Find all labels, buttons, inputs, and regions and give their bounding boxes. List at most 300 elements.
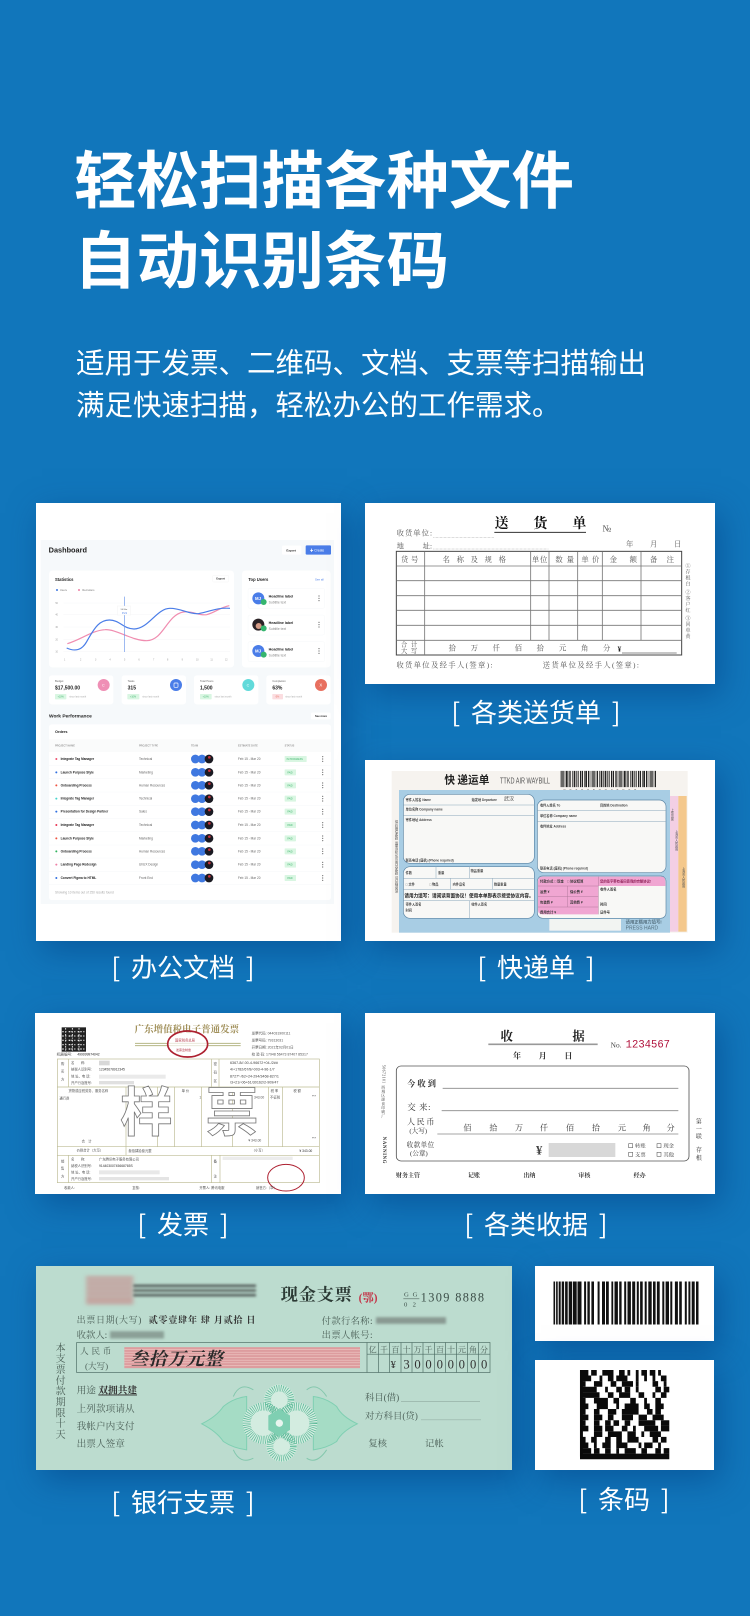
amount table: 十 — [403, 1344, 411, 1354]
statistics chart card: 11 — [210, 660, 213, 662]
stat card: budget: $17,500.00 — [55, 686, 80, 692]
cheque accounting lines: 复核 — [368, 1438, 388, 1450]
amount table — [77, 1342, 490, 1372]
invoice meta: 开票日期: 2021年02月01日 — [252, 1044, 294, 1049]
amount table: 十 — [447, 1344, 455, 1354]
delivery note heading: 送 — [495, 515, 510, 532]
receipt fields: (大写) — [409, 1126, 427, 1135]
sample watermark: 样 — [120, 1071, 173, 1147]
panel: 2D data matrix code — [535, 1360, 714, 1470]
delivery table: 货号 — [401, 555, 421, 564]
row 8 — [55, 847, 323, 856]
row 5 — [55, 807, 323, 816]
orders table: STATUS — [285, 745, 295, 748]
cheque accounting lines — [365, 1392, 444, 1450]
receipt side text: 第一联 — [694, 1118, 701, 1140]
data matrix modules — [580, 1370, 669, 1456]
side vertical text: 上海市人民政府 — [675, 829, 679, 852]
amount table: 人民币 — [80, 1345, 114, 1356]
invoice cipher text: 6367-8//-00-4-96672+04-/2## — [230, 1061, 279, 1065]
receipt payment types — [629, 1142, 675, 1158]
invoice seller info: 方 — [61, 1173, 65, 1178]
caption: office document: [ 办公文档 ] — [111, 948, 255, 985]
stat card: budget: Budget — [55, 679, 64, 683]
invoice goods rows: 单 价 — [182, 1088, 190, 1093]
statistics chart card: Statistics — [55, 577, 74, 582]
goods box — [403, 867, 534, 918]
statistics chart card: 7 — [153, 660, 155, 662]
invoice bottom stamp — [268, 1164, 304, 1191]
delivery table: 拾 — [537, 644, 545, 653]
waybill barcode — [561, 779, 657, 793]
invoice table — [57, 1059, 319, 1183]
receipt left vertical text: NANNING — [381, 1137, 386, 1164]
delivery note fields: 日 — [674, 540, 681, 549]
statistics chart card: 3 — [95, 660, 97, 662]
invoice meta: 发票号码: 79313031 — [252, 1037, 283, 1042]
delivery note heading: 单 — [572, 515, 586, 532]
caption: express waybill: [ 快递单 ] — [477, 948, 595, 985]
goods box: 内件品名 — [453, 881, 465, 886]
delivery note heading — [495, 515, 586, 532]
orders table — [49, 724, 331, 900]
top users card: Subtitle text — [269, 654, 286, 658]
receipt fields: 交 来: — [407, 1102, 431, 1112]
receipt amount units: 拾 — [489, 1122, 497, 1132]
invoice goods rows — [59, 1088, 317, 1153]
invoice seller info: 纳税人识别号: — [71, 1163, 92, 1168]
delivery table: 万 — [471, 644, 478, 653]
row 4: Technical — [139, 797, 152, 801]
row 4: PAID — [287, 798, 293, 801]
row 10: Front End — [139, 876, 153, 880]
row 10 — [55, 874, 323, 882]
invoice goods rows: *** — [312, 1136, 317, 1140]
sender box: 寄件人姓名 Name — [406, 797, 431, 802]
statistics chart card: 6 — [138, 660, 140, 662]
press hard note: PRESS HARD — [626, 926, 659, 932]
invoice goods rows: 货物或应税劳务、服务名称 — [68, 1088, 109, 1093]
row 2: Feb 15 - Mar 20 — [238, 770, 261, 774]
delivery table: 金额 — [610, 555, 650, 564]
blurred bank stamp — [86, 1278, 256, 1302]
dashboard buttons: ✚ Create — [310, 547, 324, 552]
row 7: Marketing — [139, 836, 153, 840]
invoice top stamp — [168, 1031, 208, 1057]
delivery note fields: 年 — [626, 540, 634, 549]
orders table: Orders — [55, 730, 68, 734]
receipt left vertical text: 50672101 西城区副食印刷厂 — [380, 1065, 386, 1118]
row 3 — [55, 781, 323, 790]
amount table: 0 — [414, 1358, 421, 1372]
stat card: total hours: since last month — [215, 696, 232, 699]
row 1: Feb 15 - Mar 20 — [238, 757, 261, 761]
stat card: budget: +10% — [58, 697, 64, 699]
subtitle line 2: 满足快速扫描，轻松办公的工作需求。 — [76, 383, 561, 424]
stat card: budget — [49, 675, 113, 704]
invoice seller info: 地 址、电 话: — [71, 1169, 90, 1174]
row 9 — [55, 860, 323, 869]
delivery table: 元 — [559, 644, 567, 653]
panel: delivery note: № — [602, 525, 611, 535]
statistics chart card: Users — [60, 588, 68, 592]
form background — [399, 790, 670, 933]
row 3: Human Resources — [139, 783, 166, 787]
receipt payment types: 支票 — [635, 1150, 646, 1158]
row 6: Technical — [139, 823, 152, 827]
delivery table — [396, 551, 683, 655]
delivery note fields — [397, 528, 681, 551]
amount table: (大写) — [85, 1360, 108, 1371]
delivery note fields: 收货单位: — [397, 528, 433, 537]
invoice buyer info: 买 — [61, 1069, 65, 1074]
waybill heading: 快 递运单 — [444, 772, 490, 787]
delivery note fields: 址: — [423, 542, 432, 551]
invoice seller info: 广东腾讯电子服务有限公司 — [99, 1157, 139, 1162]
receipt heading: 收 — [501, 1029, 514, 1044]
invoice seller info: 91440300745668765S — [99, 1164, 133, 1168]
top users card: Headline label — [269, 648, 293, 652]
row 8: Onboarding Process — [61, 849, 92, 853]
sample watermark: 票 — [206, 1071, 258, 1147]
receipt signatures: 出纳 — [523, 1172, 535, 1180]
panel: delivery note — [365, 503, 715, 684]
amount table: 0 — [448, 1358, 454, 1372]
panel: invoice: 499099974042 — [77, 1053, 100, 1057]
row 5: Feb 15 - Mar 20 — [238, 810, 261, 814]
invoice goods rows: *** — [312, 1095, 317, 1099]
delivery signatures: 送货单位及经手人(签章): — [543, 661, 640, 670]
subtitle line 1: 适用于发票、二维码、文档、支票等扫描输出 — [76, 341, 646, 382]
receipt amount units — [463, 1122, 675, 1132]
invoice buyer info: 区 — [214, 1079, 218, 1083]
side vertical text: 上海市人民政府 — [682, 865, 686, 888]
receipt amount units: 元 — [618, 1123, 626, 1132]
cheque number: 0 — [404, 1302, 408, 1308]
statistics chart card: 1 — [64, 660, 66, 662]
invoice goods rows: （小写） — [252, 1148, 265, 1153]
cheque purpose lines: 出票人签章 — [77, 1438, 125, 1450]
payment box — [537, 876, 666, 918]
sender box — [403, 794, 534, 863]
receipt frame — [396, 1066, 689, 1161]
amount table: 角 — [469, 1344, 477, 1354]
invoice goods rows: ¥ 343.00 — [299, 1149, 312, 1153]
amount table: 元 — [458, 1346, 466, 1354]
invoice buyer info: 方 — [61, 1077, 65, 1082]
caption: delivery note: [ 各类送货单 ] — [451, 693, 621, 730]
row 4: Feb 15 - Mar 20 — [238, 797, 261, 801]
white blank field — [549, 919, 621, 931]
invoice seller info: 注 — [214, 1173, 218, 1178]
row 8: Human Resources — [139, 849, 166, 853]
cheque purpose lines: 我帐户内支付 — [77, 1420, 135, 1432]
see more button — [311, 713, 331, 719]
top users card — [242, 571, 331, 667]
invoice footer: 开票人: 腾讯电服 — [199, 1185, 225, 1190]
row 10: Feb 15 - Mar 20 — [238, 876, 261, 880]
receipt fields — [407, 1079, 438, 1135]
amount table: 0 — [459, 1358, 465, 1372]
statistics chart card: 10 — [196, 660, 199, 662]
row 6: PAID — [287, 824, 293, 827]
orders table: PROJECT NAME — [55, 745, 75, 748]
amount table: 千 — [425, 1346, 433, 1354]
receipt amount units: 角 — [643, 1122, 651, 1132]
row 9: PAID — [287, 864, 293, 867]
row 7: Feb 15 - Mar 20 — [238, 836, 261, 840]
dashboard heading: Dashboard — [49, 545, 87, 554]
statistics chart card: 8 — [167, 660, 169, 662]
receipt payment types: 其他 — [663, 1150, 675, 1158]
invoice buyer info: 密 — [214, 1061, 218, 1066]
receipt amount units: 万 — [515, 1123, 523, 1132]
receipt number: No. — [611, 1040, 622, 1049]
invoice goods rows: 合 计 — [82, 1139, 92, 1144]
row 9: Landing Page Redesign — [61, 863, 97, 867]
receipt fields: 人民币 — [407, 1116, 436, 1126]
statistics chart card: Recruiters — [82, 588, 95, 592]
cheque number — [403, 1290, 484, 1308]
invoice seller info: 备 — [214, 1159, 218, 1164]
guilloche ornament — [202, 1384, 357, 1462]
statistics chart card: 40 — [55, 615, 59, 617]
invoice buyer info: 名 称: — [71, 1060, 85, 1065]
delivery table: 单位 — [532, 555, 548, 564]
invoice meta: 校 验 码: 17948 56473 87407 85317 — [252, 1051, 308, 1056]
invoice seller info: 开户行及账号: — [71, 1176, 92, 1181]
amount table: 百 — [436, 1346, 444, 1354]
delivery table: 备注 — [650, 555, 683, 564]
delivery note fields: 地 — [397, 542, 405, 551]
press hard note: 请用正楷用力填写! — [626, 919, 662, 926]
statistics chart card: P.21 — [122, 611, 128, 615]
invoice goods rows: 通行费 — [59, 1095, 70, 1100]
stat card: budget: since last month — [69, 696, 87, 699]
cheque validity note: 本支票付款期限十天 — [53, 1341, 65, 1440]
top users card: MJ — [255, 649, 262, 654]
payment box: 运费 ¥ — [540, 889, 550, 894]
stat card: tasks: since last month — [142, 696, 160, 699]
invoice meta: 发票代码: 044031900111 — [252, 1031, 291, 1036]
see more button: See more — [315, 714, 327, 718]
goods box: 收件人签名 — [471, 901, 487, 906]
cheque payer bank — [322, 1315, 446, 1327]
invoice goods rows: 不征税 — [270, 1095, 281, 1100]
side vertical text: 保价赔偿条款 运单须知 协议内容条款 请仔细阅读 — [394, 819, 398, 893]
cheque date: 出票日期(大写) — [77, 1314, 142, 1325]
payment box: 收件人签名 — [600, 887, 617, 892]
cheque number: 1309 8888 — [421, 1290, 484, 1304]
invoice buyer info: 地 址、电 话: — [71, 1073, 90, 1078]
receipt payment types: 转账 — [635, 1142, 646, 1150]
delivery table: ¥ — [618, 644, 622, 653]
caption: invoice: [ 发票 ] — [137, 1205, 229, 1242]
cheque number: G — [404, 1292, 409, 1298]
amount table: 0 — [425, 1358, 432, 1372]
press hard note — [626, 919, 662, 932]
dashboard buttons: Export — [286, 548, 296, 552]
invoice heading: 广东增值税电子普通发票 — [135, 1022, 240, 1036]
delivery table: 名称及规格 — [443, 555, 513, 564]
sender box: 联系电话 (座机) (Phone required) — [406, 857, 454, 862]
payment box: 付款方式 □ 现金 □ 协议结算 — [540, 878, 584, 883]
cheque payee — [77, 1329, 164, 1341]
invoice buyer info: 码 — [214, 1069, 218, 1074]
invoice buyer info: 纳税人识别号: — [71, 1067, 92, 1072]
receipt left vertical text — [380, 1065, 386, 1164]
row 2: Launch Purpose Style — [61, 770, 94, 774]
sample watermark — [120, 1071, 258, 1147]
side vertical text — [394, 807, 686, 893]
top users card: MJ — [255, 596, 262, 601]
panel: invoice — [35, 1013, 341, 1194]
orders table: PROJECT TYPE — [139, 745, 158, 748]
amount table: 叁拾万元整 — [130, 1349, 226, 1369]
top users card: Headline label — [269, 621, 293, 625]
cheque date: 贰零壹肆年 肆 月贰拾 日 — [149, 1314, 256, 1325]
receipt payee — [407, 1140, 435, 1158]
invoice qr code — [62, 1027, 86, 1052]
stat card: total hours: C — [247, 683, 250, 687]
cheque payer bank: 付款行名称: — [322, 1315, 373, 1327]
statistics chart card: 90 Mar — [121, 608, 128, 611]
stat card: total hours: 1,500 — [200, 686, 213, 692]
row 6: Integrate Tag Manager — [61, 823, 95, 827]
cheque accounting lines: 科目(借) — [365, 1392, 399, 1404]
invoice seller info: 名 称: — [71, 1157, 85, 1162]
stat card: tasks — [122, 675, 186, 704]
receipt payee: (公章) — [410, 1149, 428, 1158]
receipt amount units: 拾 — [592, 1122, 600, 1132]
panel: invoice: 发票监制章 — [176, 1047, 191, 1052]
row 1: Technical — [139, 757, 152, 761]
goods box: 件数 — [406, 870, 413, 875]
receipt signatures: 财务主管 — [396, 1172, 420, 1180]
invoice cipher text — [230, 1061, 279, 1084]
waybill heading — [444, 772, 550, 787]
amount table: 百 — [391, 1346, 399, 1354]
cheque purpose lines — [77, 1384, 137, 1450]
receipt heading — [501, 1029, 585, 1044]
sender box: 单位名称 Company name — [406, 807, 443, 812]
top users card: Subtitle text — [269, 627, 286, 631]
orders table: TEAM — [191, 745, 198, 748]
payment box: 您的签字带有着同意我的完整协议! — [600, 879, 651, 884]
panel: office document dashboard — [36, 503, 341, 941]
cheque accounting lines: 对方科目(贷) — [365, 1410, 418, 1422]
amount table: ¥ — [391, 1360, 397, 1371]
side note: ①存根白 ②客户红 ③回单黄 — [684, 563, 690, 640]
invoice goods rows: 1 — [199, 1096, 201, 1100]
receipt fields: 今收到 — [407, 1079, 438, 1089]
goods box: 重量 — [438, 870, 445, 875]
receipt signatures: 经办 — [634, 1172, 647, 1180]
row 5: Presentation for Design Partner — [61, 810, 109, 814]
goods box: 寄件人签名 — [406, 901, 421, 906]
invoice buyer info: 购 — [61, 1061, 65, 1066]
payment box: 时间 — [600, 902, 607, 907]
stat card: total hours: Total Hours — [200, 679, 214, 683]
delivery table: 分 — [603, 644, 611, 653]
stat card: tasks: +10% — [130, 697, 136, 699]
statistics chart card: 12 — [225, 660, 228, 662]
cheque title: 现金支票 — [281, 1284, 353, 1304]
caption: barcode: [ 条码 ] — [578, 1480, 670, 1517]
sender box: 武汉 — [504, 796, 514, 803]
invoice goods rows: 价税合计（大写） — [77, 1148, 103, 1153]
row 6: Feb 15 - Mar 20 — [238, 823, 261, 827]
barcode bars — [554, 1282, 698, 1324]
stat card: completion: Completion — [272, 679, 286, 683]
cheque number: G — [413, 1292, 418, 1298]
amount table: 0 — [481, 1358, 487, 1372]
row 3: PAID — [287, 784, 293, 787]
amount table: 分 — [480, 1344, 488, 1354]
goods box: □ 文件 — [406, 881, 416, 886]
payment box: 保价费 ¥ — [570, 889, 583, 894]
statistics chart card: 10 — [55, 651, 59, 653]
title line 2: 自动识别条码 — [74, 227, 449, 297]
amount table: 3 — [403, 1358, 410, 1372]
delivery table: 仟 — [493, 644, 501, 653]
statistics chart card: 2 — [80, 660, 82, 662]
cheque purpose lines: 用途 双拥共建 — [77, 1384, 137, 1396]
top users card: Headline label — [269, 595, 293, 599]
row 9: Feb 15 - Mar 20 — [238, 863, 261, 867]
goods box: □ 物品 — [429, 881, 438, 886]
invoice footer: 销售方:（章） — [256, 1185, 277, 1190]
statistics chart card: Export — [216, 577, 225, 581]
receiver box — [537, 800, 666, 873]
dashboard buttons — [282, 545, 331, 555]
sender box: 始发地 Departure — [472, 797, 497, 802]
top users card: See all — [315, 578, 324, 582]
payment box: 其他费 ¥ — [570, 900, 583, 905]
delivery table: 佰 — [515, 644, 523, 653]
delivery note heading: 货 — [533, 515, 549, 532]
delivery table: 大写 — [401, 646, 421, 655]
row 2 — [55, 768, 323, 777]
payment box: 包装费 ¥ — [540, 900, 553, 905]
row 2: Marketing — [139, 770, 153, 774]
statistics chart card: 30 — [55, 627, 59, 629]
panel: invoice: 国家税务总局 — [175, 1038, 196, 1043]
row 1: Integrate Tag Manager — [61, 757, 95, 761]
sender box: 寄件地址 Address — [406, 817, 432, 822]
goods box: 请用力填写：请阅读背面协议！使用本单即表示接受协议内容。 — [404, 891, 534, 899]
receiver box: 目的地 Destination — [600, 802, 628, 807]
amount table: 千 — [380, 1346, 388, 1354]
row 4 — [55, 794, 323, 803]
receipt date: 月 — [539, 1052, 547, 1061]
panel: receipt: ¥ — [536, 1144, 543, 1158]
receipt amount units: 仟 — [540, 1122, 548, 1132]
work performance heading: Work Performance — [49, 714, 92, 720]
invoice footer: 收款人: — [64, 1185, 75, 1190]
row 7: Launch Purpose Style — [61, 836, 94, 840]
delivery table: 角 — [581, 644, 588, 653]
delivery signatures — [396, 661, 640, 670]
invoice seller info: 售 — [61, 1166, 64, 1171]
side vertical text: 上传页面 — [670, 807, 674, 821]
row 7: PAID — [287, 837, 293, 840]
panel: invoice: 机器编号: — [57, 1052, 72, 1057]
receiver box: 收件地址 Address — [540, 823, 566, 828]
top users card: Top Users — [248, 577, 269, 582]
row 8: Feb 15 - Mar 20 — [238, 849, 261, 853]
receipt number: 1234567 — [626, 1040, 670, 1052]
